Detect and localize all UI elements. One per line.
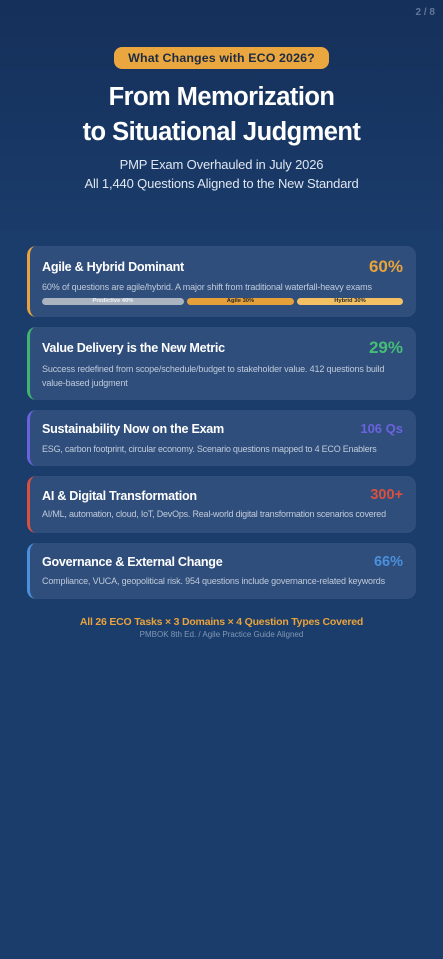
card: sustainability (27, 410, 416, 466)
heading: Governance & External Change (42, 555, 222, 569)
stat: 60% (369, 257, 403, 276)
card: agile and hybrid (27, 246, 416, 317)
footer note: PMBOK 8th Ed. / Agile Practice Guide Aligned (140, 630, 303, 639)
description: value-based judgment (42, 378, 128, 388)
description: ESG, carbon footprint, circular economy. Scenario questions mapped to 4 ECO Enablers (42, 444, 377, 454)
segment: agile (187, 298, 294, 305)
description (42, 364, 384, 388)
card: value delivery (27, 327, 416, 400)
segment: predictive: Predictive 40% (93, 298, 133, 304)
heading: Agile & Hybrid Dominant (42, 260, 184, 274)
subtitle: PMP Exam Overhauled in July 2026 (120, 156, 323, 172)
segment: predictive (42, 298, 184, 305)
description: 60% of questions are agile/hybrid. A major shift from traditional waterfall-heavy exams (42, 282, 372, 292)
stat: 66% (374, 554, 403, 570)
description: Compliance, VUCA, geopolitical risk. 954 questions include governance-related keywords (42, 576, 385, 586)
heading: Sustainability Now on the Exam (42, 422, 224, 436)
badge: What Changes with ECO 2026? (128, 51, 315, 65)
stat: 106 Qs (360, 421, 403, 436)
subtitle: All 1,440 Questions Aligned to the New Standard (84, 176, 359, 191)
segment: hybrid: Hybrid 30% (334, 298, 366, 304)
title: to Situational Judgment (83, 118, 360, 146)
stat: 300+ (370, 487, 403, 503)
header panel (0, 0, 443, 230)
description: Success redefined from scope/schedule/budget to stakeholder value. 412 questions build (42, 364, 384, 374)
heading: AI & Digital Transformation (42, 488, 197, 502)
footer highlight: All 26 ECO Tasks × 3 Domains × 4 Question Types Covered (80, 616, 363, 628)
segment: agile: Agile 30% (227, 298, 254, 304)
card: governance (27, 543, 416, 599)
stat: 29% (369, 338, 403, 357)
page number: 2 / 8 (416, 6, 435, 18)
subtitle (84, 156, 359, 191)
title (82, 82, 361, 146)
description: AI/ML, automation, cloud, IoT, DevOps. Real-world digital transformation scenarios covered (42, 509, 386, 519)
stacked bar (42, 298, 403, 305)
card: AI and digital (27, 476, 416, 533)
heading: Value Delivery is the New Metric (42, 340, 225, 354)
badge (114, 47, 329, 69)
segment: hybrid (297, 298, 403, 305)
title: From Memorization (109, 82, 334, 110)
